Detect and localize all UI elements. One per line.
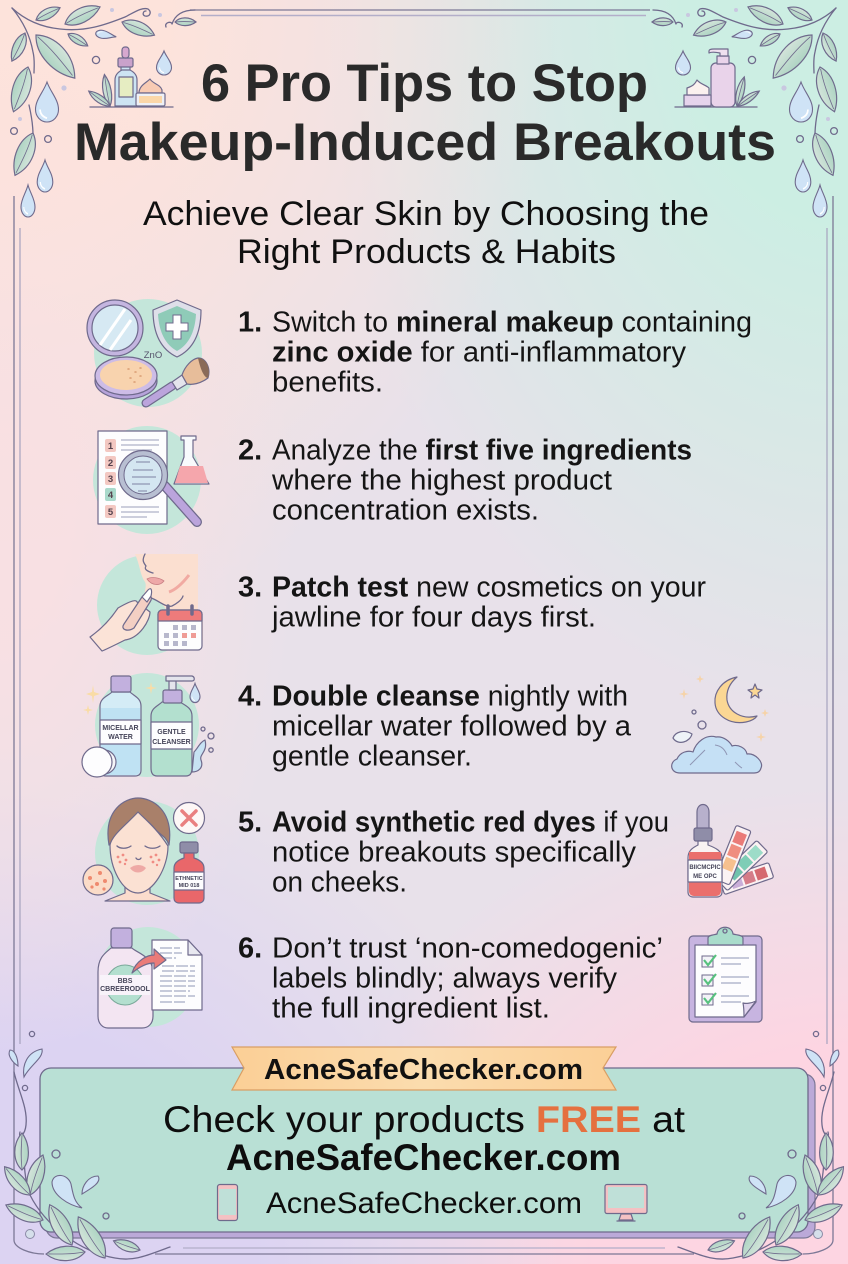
tip 3 (90, 554, 706, 655)
tip 1 text: benefits. (272, 366, 383, 398)
icon: mineral compact, shield and brush: ZnO (144, 350, 162, 361)
subtitle: Achieve Clear Skin by Choosing the (143, 195, 709, 233)
corner ornament: bottom left (0, 1031, 170, 1263)
icon: micellar water and gentle cleanser: GENTLE (157, 729, 186, 736)
icon: red dye bottle and colour swatches (688, 804, 774, 897)
tip 4 number: 4. (238, 680, 262, 712)
corner ornament: bottom right (678, 1031, 848, 1263)
tip 5 (83, 798, 774, 905)
ribbon banner: AcneSafeChecker.com (264, 1054, 583, 1086)
tip 2 number: 2. (238, 434, 262, 466)
call to action panel (40, 1047, 815, 1238)
tip 6 text: labels blindly; always verify (272, 962, 617, 994)
tip 5 text (272, 806, 669, 898)
icon: serum bottle and jar (86, 47, 173, 109)
icon: mineral compact, shield and brush (87, 299, 209, 407)
tip 6 text: Don’t trust ‘non-comedogenic’ (272, 932, 663, 964)
icon: moon, stars and foam cloud (672, 675, 769, 773)
ribbon banner (232, 1047, 616, 1090)
tip 3 text: jawline for four days first. (271, 602, 596, 634)
subtitle: Right Products & Habits (237, 233, 616, 271)
corner ornament: top left (6, 0, 196, 217)
tip 1 (87, 299, 752, 407)
icon: clipboard checklist (689, 927, 762, 1022)
tip 3 number: 3. (238, 572, 262, 604)
icon: face with cheek breakouts, warning and red bottle: ETHNETIC (175, 876, 203, 882)
call to action text: AcneSafeChecker.com (266, 1187, 582, 1220)
icon: micellar water and gentle cleanser: MICELLAR (102, 725, 139, 732)
tip 4 (82, 673, 769, 777)
tip 2 (93, 426, 692, 534)
icon: ingredient list, magnifier and flask: 1 (108, 441, 114, 452)
tip 2 text (271, 434, 692, 526)
icon: face with cheek breakouts, warning and red bottle (83, 798, 204, 905)
icon: micellar water and gentle cleanser: WATER (108, 734, 133, 741)
tip 3 text: Patch test new cosmetics on your (272, 572, 706, 604)
icon: ingredient list, magnifier and flask: 2 (108, 458, 113, 469)
call to action text: Check your products FREE at (163, 1099, 686, 1140)
tip 1 text (272, 306, 752, 398)
tip 4 text (272, 680, 632, 772)
corner ornament: top right (652, 0, 842, 217)
icon: face with cheek breakouts, warning and red bottle: MID 018 (179, 883, 199, 889)
icon: desktop monitor (605, 1184, 647, 1221)
tip 1 text: Switch to mineral makeup containing (272, 306, 752, 338)
tip 6 text (272, 932, 663, 1024)
title: Makeup-Induced Breakouts (74, 113, 776, 172)
tip 1 text: zinc oxide for anti-inflammatory (272, 336, 686, 368)
tip 2 text: Analyze the first five ingredients (272, 434, 692, 466)
icon: pump bottle and jar (675, 49, 761, 109)
icon: phone (218, 1184, 238, 1220)
tip 6 text: the full ingredient list. (272, 992, 550, 1024)
icon: red dye bottle and colour swatches: ME OPC (693, 874, 718, 880)
icon: red dye bottle and colour swatches: BIICMCPIC (689, 865, 721, 871)
tip 5 text: on cheeks. (272, 866, 407, 898)
icon: ingredient list, magnifier and flask: 3 (108, 474, 113, 485)
tip 5 text: notice breakouts specifically (272, 836, 636, 868)
icon: ingredient list, magnifier and flask: 5 (108, 507, 114, 518)
tip 6 number: 6. (238, 932, 262, 964)
icon: micellar water and gentle cleanser (82, 673, 214, 777)
title: 6 Pro Tips to Stop (201, 54, 648, 113)
tip 6 (98, 927, 762, 1028)
tip 2 text: where the highest product (271, 464, 612, 496)
call to action text: AcneSafeChecker.com (226, 1137, 621, 1178)
tip 4 text: micellar water followed by a (272, 710, 632, 742)
icon: patch test on jawline with calendar (90, 554, 203, 655)
title (74, 54, 776, 172)
tip 3 text (271, 572, 706, 634)
icon: bottle with arrow to ingredient sheet: BBS (118, 978, 133, 985)
icon: bottle with arrow to ingredient sheet (98, 927, 202, 1028)
tip 5 text: Avoid synthetic red dyes if you (272, 806, 669, 838)
tip 2 text: concentration exists. (272, 494, 539, 526)
tip 4 text: gentle cleanser. (272, 740, 472, 772)
icon: ingredient list, magnifier and flask (93, 426, 209, 534)
call to action text (163, 1099, 686, 1220)
icon: ingredient list, magnifier and flask: 4 (108, 490, 114, 501)
icon: micellar water and gentle cleanser: CLEANSER (152, 739, 191, 746)
tip 1 number: 1. (238, 306, 262, 338)
subtitle (143, 195, 709, 271)
tip 4 text: Double cleanse nightly with (272, 680, 628, 712)
icon: bottle with arrow to ingredient sheet: CBREERODOL (100, 986, 151, 993)
tip 5 number: 5. (238, 806, 262, 838)
